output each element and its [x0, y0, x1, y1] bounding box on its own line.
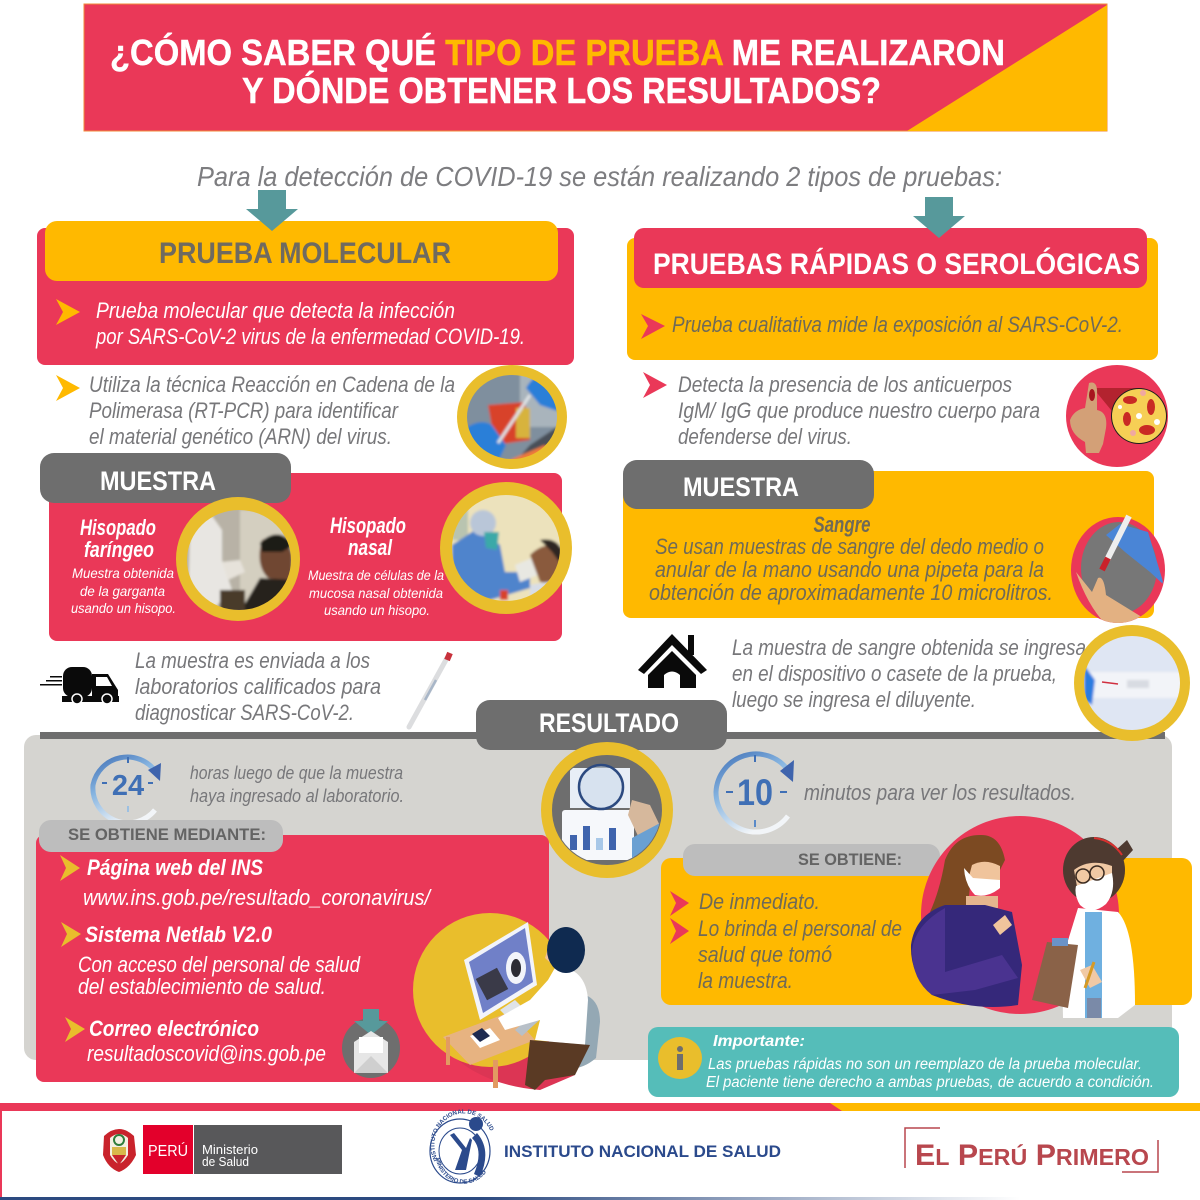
text: muestra enviada: La muestra es enviada a los: [135, 648, 370, 673]
tab: muestra: MUESTRA: [683, 472, 799, 502]
text: muestra enviada: laboratorios calificados para: [135, 674, 381, 699]
logo: el peru primero: [905, 1128, 1158, 1172]
text: sangre ingresa: La muestra de sangre obtenida se ingresa: [732, 635, 1086, 660]
arrow right: [913, 197, 965, 238]
panel: muestra molecular: [40, 453, 572, 641]
text: importante: Importante:: [713, 1033, 805, 1050]
subtitle: Para la detección de COVID-19 se están realizando 2 tipos de pruebas:: [197, 161, 1002, 192]
text: minutos: minutos para ver los resultados.: [804, 780, 1076, 805]
icon: reloj 10 minutos: [716, 754, 794, 832]
title banner: Y DÓNDE OBTENER LOS RESULTADOS?: [242, 69, 881, 111]
tab: se obtiene mediante: [39, 820, 283, 852]
logo: instituto nacional de salud: INSTITUTO NACIONAL DE SALUD: [430, 1109, 494, 1162]
item: correo: resultadoscovid@ins.gob.pe: [87, 1041, 326, 1066]
text: horas: horas luego de que la muestra: [190, 763, 403, 783]
footer: [0, 1103, 1200, 1200]
photo: casete de prueba: [1074, 625, 1190, 741]
item: netlab: Con acceso del personal de salud: [78, 952, 361, 977]
logo: instituto nacional de salud: [429, 1109, 781, 1184]
tab: muestra: MUESTRA: [100, 466, 216, 496]
bullet arrow: [641, 314, 665, 339]
text: hisopado nasal: Muestra de células de la: [308, 567, 444, 583]
items: salud que tomó: [698, 942, 832, 967]
item: pagina web: Página web del INS: [87, 855, 263, 880]
icon: informacion: [658, 1037, 702, 1079]
text: hisopado faringeo: Muestra obtenida: [72, 565, 174, 581]
panel: se obtiene: [661, 844, 1192, 1005]
items: la muestra.: [698, 968, 793, 993]
text: detecta anticuerpos: Detecta la presencia de los anticuerpos: [678, 372, 1012, 397]
text: hisopado faringeo: faríngeo: [84, 537, 154, 562]
icon: camion: [40, 667, 119, 704]
tab: se obtiene: SE OBTIENE:: [798, 850, 902, 869]
callout: importante: [648, 1027, 1179, 1097]
icon: sangre en dedo: [1066, 365, 1168, 467]
item: netlab: del establecimiento de salud.: [78, 974, 326, 999]
text: sangre ingresa: luego se ingresa el diluyente.: [732, 687, 976, 712]
items: [670, 889, 902, 993]
description: por SARS-CoV-2 virus de la enfermedad COVID-19.: [95, 324, 525, 349]
icon: casa: [638, 634, 707, 688]
arrow left: [246, 190, 298, 231]
illustration: paciente y doctora: [911, 816, 1135, 1018]
photo: hisopado nasal: [440, 482, 572, 614]
tab: resultado: RESULTADO: [539, 708, 679, 738]
tab: se obtiene: [683, 844, 940, 876]
text: hisopado faringeo: Hisopado: [80, 515, 156, 540]
bullet arrow: [56, 299, 80, 325]
text: muestra enviada: diagnosticar SARS-CoV-2.: [135, 700, 354, 725]
title banner: [84, 4, 1107, 131]
icon: reloj 24 horas: [93, 757, 161, 823]
heading: prueba molecular: PRUEBA MOLECULAR: [159, 237, 451, 270]
tab: resultado: [476, 700, 727, 750]
tab: muestra: [40, 453, 291, 503]
text: hisopado faringeo: [71, 515, 176, 616]
logo: ministerio de salud: PERÚ: [148, 1143, 188, 1160]
bullet: tecnica RT-PCR: Utiliza la técnica Reacción en Cadena de la: [89, 372, 455, 397]
text: sangre: Sangre: [814, 512, 870, 537]
item: pagina web: [60, 855, 432, 910]
bullet: tecnica RT-PCR: el material genético (ARN) del virus.: [89, 424, 392, 449]
illustration: persona en computadora: [413, 913, 600, 1090]
description: [95, 298, 525, 349]
panel: resultado background: [24, 735, 1172, 1060]
icon: pipeta y mano: [1071, 516, 1165, 630]
panel: se obtiene mediante: [36, 820, 549, 1082]
photo: laboratorio PCR: [457, 365, 567, 469]
logo: instituto nacional de salud: INSTITUTO NACIONAL DE SALUD: [504, 1143, 781, 1161]
text: horas: [190, 763, 404, 806]
text: sangre ingresa: en el dispositivo o casete de la prueba,: [732, 661, 1057, 686]
text: importante: Las pruebas rápidas no son un reemplazo de la prueba molecular.: [708, 1056, 1142, 1073]
text: horas: haya ingresado al laboratorio.: [190, 786, 404, 806]
description: Prueba molecular que detecta la infección: [96, 298, 455, 323]
icon: analisis de resultados: [541, 742, 673, 878]
items: De inmediato.: [699, 889, 820, 914]
logo: ministerio de salud: de Salud: [202, 1155, 249, 1169]
title text: ¿CÓMO SABER QUÉ TIPO DE PRUEBA ME REALIZARON: [110, 31, 1005, 73]
text: importante: [706, 1033, 1154, 1091]
text: sangre: Se usan muestras de sangre del dedo medio o: [655, 534, 1044, 559]
icon: reloj 24 horas: 24: [112, 770, 144, 802]
bullet: tecnica RT-PCR: Polimerasa (RT-PCR) para identificar: [89, 398, 399, 423]
text: sangre: anular de la mano usando una pipeta para la: [655, 557, 1044, 582]
text: sangre ingresa: [732, 635, 1086, 712]
text: importante: El paciente tiene derecho a ambas pruebas, de acuerdo a condición.: [706, 1074, 1154, 1091]
panel: muestra sangre: [623, 460, 1154, 618]
icon: correo: [342, 1009, 400, 1078]
text: detecta anticuerpos: [643, 372, 1040, 449]
text: hisopado faringeo: de la garganta: [80, 583, 165, 599]
icon: hisopo: [409, 653, 450, 727]
text: hisopado nasal: mucosa nasal obtenida: [309, 585, 443, 601]
panel: prueba molecular: [37, 221, 574, 365]
tab: muestra: [623, 460, 874, 509]
item: pagina web: www.ins.gob.pe/resultado_coronavirus/: [83, 885, 432, 910]
logo: ministerio de salud: [103, 1125, 342, 1174]
heading: pruebas rapidas: PRUEBAS RÁPIDAS O SEROLÓGICAS: [653, 247, 1140, 281]
item: netlab: [61, 922, 361, 999]
text: hisopado nasal: [308, 513, 444, 618]
panel: pruebas rapidas: [627, 228, 1158, 360]
text: detecta anticuerpos: defenderse del virus.: [678, 424, 852, 449]
logo: ministerio de salud: Ministerio: [202, 1143, 258, 1157]
photo: hisopado faringeo: [176, 497, 300, 621]
item: netlab: Sistema Netlab V2.0: [85, 922, 273, 947]
tab: se obtiene mediante: SE OBTIENE MEDIANTE:: [68, 825, 266, 844]
text: sangre: [649, 512, 1053, 605]
divider bar: [40, 732, 1165, 739]
item: correo: Correo electrónico: [89, 1016, 259, 1041]
text: muestra enviada: [135, 648, 381, 725]
text: detecta anticuerpos: IgM/ IgG que produce nuestro cuerpo para: [678, 398, 1040, 423]
item: correo: [65, 1016, 326, 1066]
text: hisopado nasal: usando un hisopo.: [324, 602, 430, 618]
logo: instituto nacional de salud: MINISTERIO DE SALUD: [436, 1158, 486, 1184]
text: hisopado nasal: Hisopado: [330, 513, 406, 538]
text: hisopado nasal: nasal: [348, 535, 393, 560]
logo: el peru primero: EL PERÚ PRIMERO: [915, 1139, 1149, 1172]
items: Lo brinda el personal de: [698, 916, 902, 941]
bullet: tecnica RT-PCR: [56, 372, 455, 449]
icon: reloj 10 minutos: 10: [737, 772, 773, 813]
description: Prueba cualitativa mide la exposición al SARS-CoV-2.: [672, 312, 1123, 337]
text: sangre: obtención de aproximadamente 10 microlitros.: [649, 580, 1053, 605]
text: hisopado faringeo: usando un hisopo.: [71, 600, 176, 616]
